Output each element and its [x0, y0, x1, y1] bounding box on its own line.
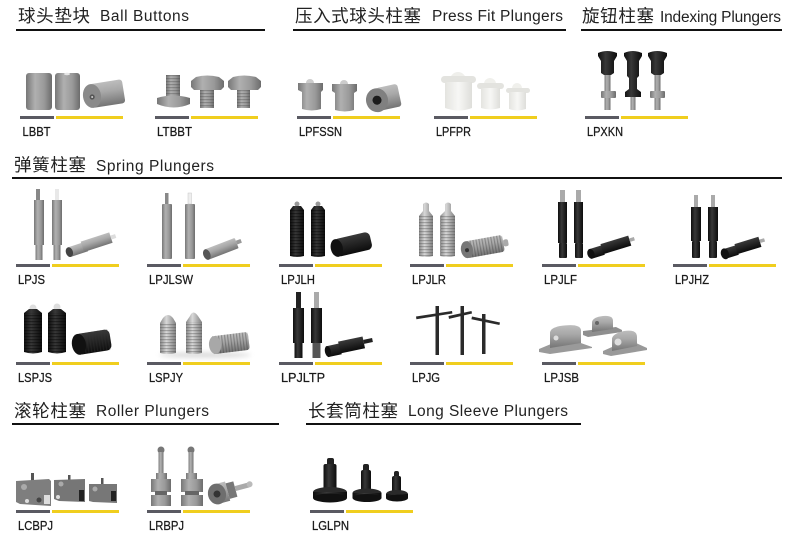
product: LPJLH: [279, 202, 382, 287]
product: LPFSSN: [297, 79, 402, 139]
heading: Press Fit Plungers: 压入式球头柱塞: [295, 6, 421, 26]
heading: Ball Buttons: 球头垫块: [18, 6, 90, 26]
heading: Indexing Plungers: Indexing Plungers: [660, 9, 781, 26]
product: LPJLSW: [147, 193, 250, 287]
heading: Long Sleeve Plungers: Long Sleeve Plungers: [408, 403, 568, 420]
heading: Roller Plungers: 滚轮柱塞: [14, 401, 86, 421]
heading: Roller Plungers: [12, 401, 279, 425]
heading: Spring Plungers: 弹簧柱塞: [14, 155, 86, 175]
section: Indexing Plungers: [581, 6, 782, 139]
product: LPXKN: LPXKN: [587, 125, 623, 139]
product: LPJLR: LPJLR: [412, 273, 446, 287]
product: LPJLTP: LPJLTP: [281, 371, 325, 385]
product: LSPJY: LSPJY: [149, 371, 184, 385]
product: LPJSB: LPJSB: [544, 371, 579, 385]
product: LSPJY: [147, 312, 251, 385]
product: LPJG: [410, 306, 513, 385]
heading: Press Fit Plungers: Press Fit Plungers: [432, 8, 563, 25]
section: Press Fit Plungers: [293, 6, 566, 139]
section: Long Sleeve Plungers: [306, 401, 581, 533]
product: LPJHZ: LPJHZ: [675, 273, 709, 287]
section: Spring Plungers: [12, 155, 782, 385]
heading: Spring Plungers: Spring Plungers: [96, 158, 214, 175]
product: LCBPJ: [16, 473, 119, 533]
heading: Indexing Plungers: [581, 6, 782, 31]
heading: Roller Plungers: Roller Plungers: [96, 403, 209, 420]
heading: Ball Buttons: [16, 6, 265, 31]
product: LPJS: [16, 189, 119, 287]
product: LPJLH: LPJLH: [281, 273, 315, 287]
heading: Indexing Plungers: 旋钮柱塞: [582, 6, 654, 26]
product: LSPJS: [16, 304, 119, 385]
heading: Long Sleeve Plungers: 长套筒柱塞: [308, 401, 398, 421]
product: LPJLF: [542, 190, 645, 287]
heading: Press Fit Plungers: [293, 6, 566, 31]
product: LRBPJ: LRBPJ: [149, 519, 184, 533]
product: LPJLTP: [279, 292, 382, 385]
product: LGLPN: [310, 458, 413, 533]
product: LBBT: LBBT: [22, 125, 51, 139]
product: LPJS: LPJS: [18, 273, 45, 287]
product: LPFPR: [434, 72, 537, 139]
product: LPXKN: [585, 51, 688, 139]
product: LPFPR: LPFPR: [436, 125, 471, 139]
heading: Spring Plungers: [12, 155, 782, 179]
product: LTBBT: LTBBT: [157, 125, 192, 139]
product: LPJSB: [539, 316, 647, 385]
product: LSPJS: LSPJS: [18, 371, 52, 385]
section: Ball Buttons: [16, 6, 265, 139]
heading: Long Sleeve Plungers: [306, 401, 581, 425]
product: LRBPJ: [147, 446, 255, 533]
product: LTBBT: [155, 75, 261, 139]
product: LPFSSN: LPFSSN: [299, 125, 342, 139]
product: LPJHZ: [673, 195, 776, 287]
product: LBBT: [20, 73, 125, 139]
product: LGLPN: LGLPN: [312, 519, 349, 533]
product: LPJLSW: LPJLSW: [149, 273, 193, 287]
section: Roller Plungers: [12, 401, 279, 533]
heading: Ball Buttons: Ball Buttons: [100, 8, 189, 25]
product: LPJLR: [410, 202, 513, 287]
product: LCBPJ: LCBPJ: [18, 519, 53, 533]
product: LPJLF: LPJLF: [544, 273, 577, 287]
product: LPJG: LPJG: [412, 371, 440, 385]
